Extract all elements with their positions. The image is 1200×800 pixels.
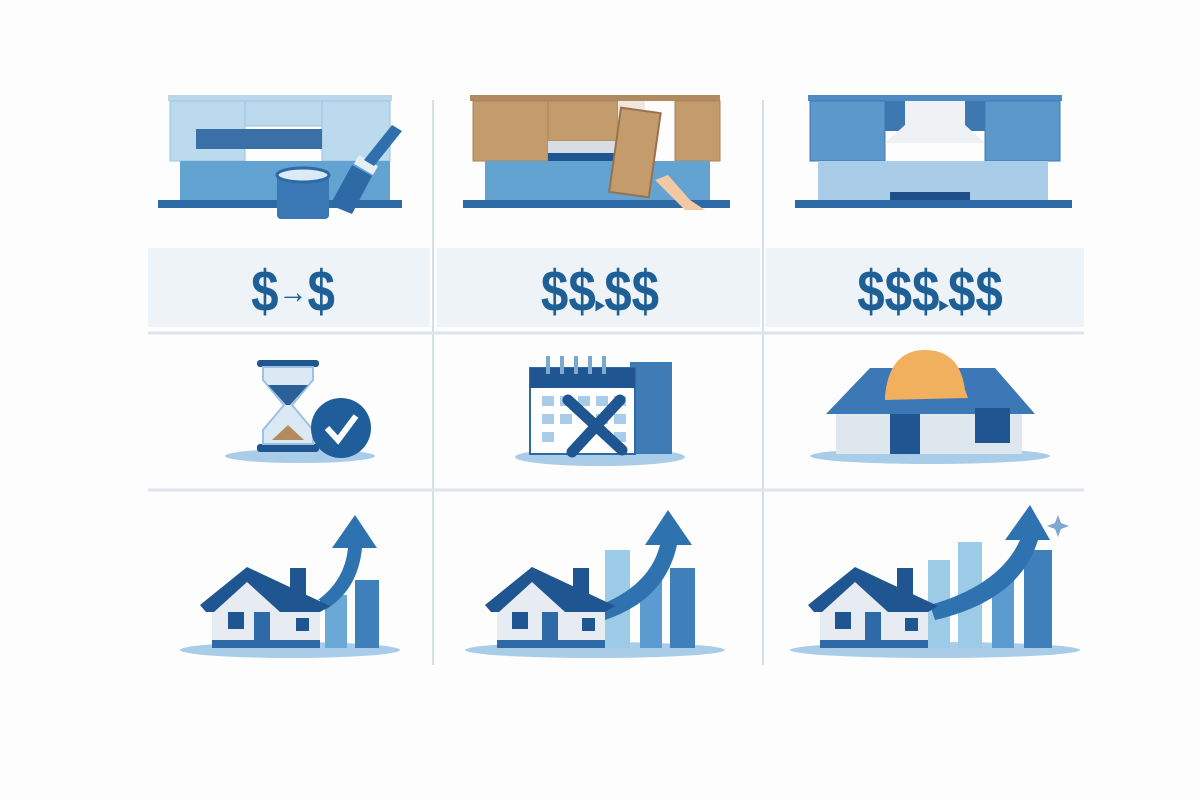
icon: hourglass with check xyxy=(225,360,375,463)
icon: sparkle xyxy=(1047,515,1069,537)
chart: value increase 3 xyxy=(790,505,1080,658)
text: cost high: $$$▸$$ xyxy=(857,259,1003,324)
text: cost low xyxy=(251,259,335,324)
icon: cabinet door xyxy=(609,108,661,197)
chart: value increase 2 xyxy=(465,510,725,658)
icon: house with hard hat xyxy=(810,350,1050,464)
text: cost low: $ xyxy=(251,259,279,324)
icon: calendar with tools xyxy=(515,356,685,466)
text: cost low: → xyxy=(279,272,307,311)
panel: painted cabinets xyxy=(158,95,402,219)
icon: hand xyxy=(655,175,705,210)
icon: paint can xyxy=(277,168,329,219)
text: cost medium: $$▸$$ xyxy=(541,259,659,324)
chart: value increase 1 xyxy=(180,515,400,658)
panel: full renovation kitchen xyxy=(795,95,1072,208)
text: cost low: $ xyxy=(307,259,335,324)
icon: paint brush xyxy=(330,125,402,214)
panel: cost row xyxy=(148,248,1084,327)
panel: refaced cabinets xyxy=(463,95,730,210)
